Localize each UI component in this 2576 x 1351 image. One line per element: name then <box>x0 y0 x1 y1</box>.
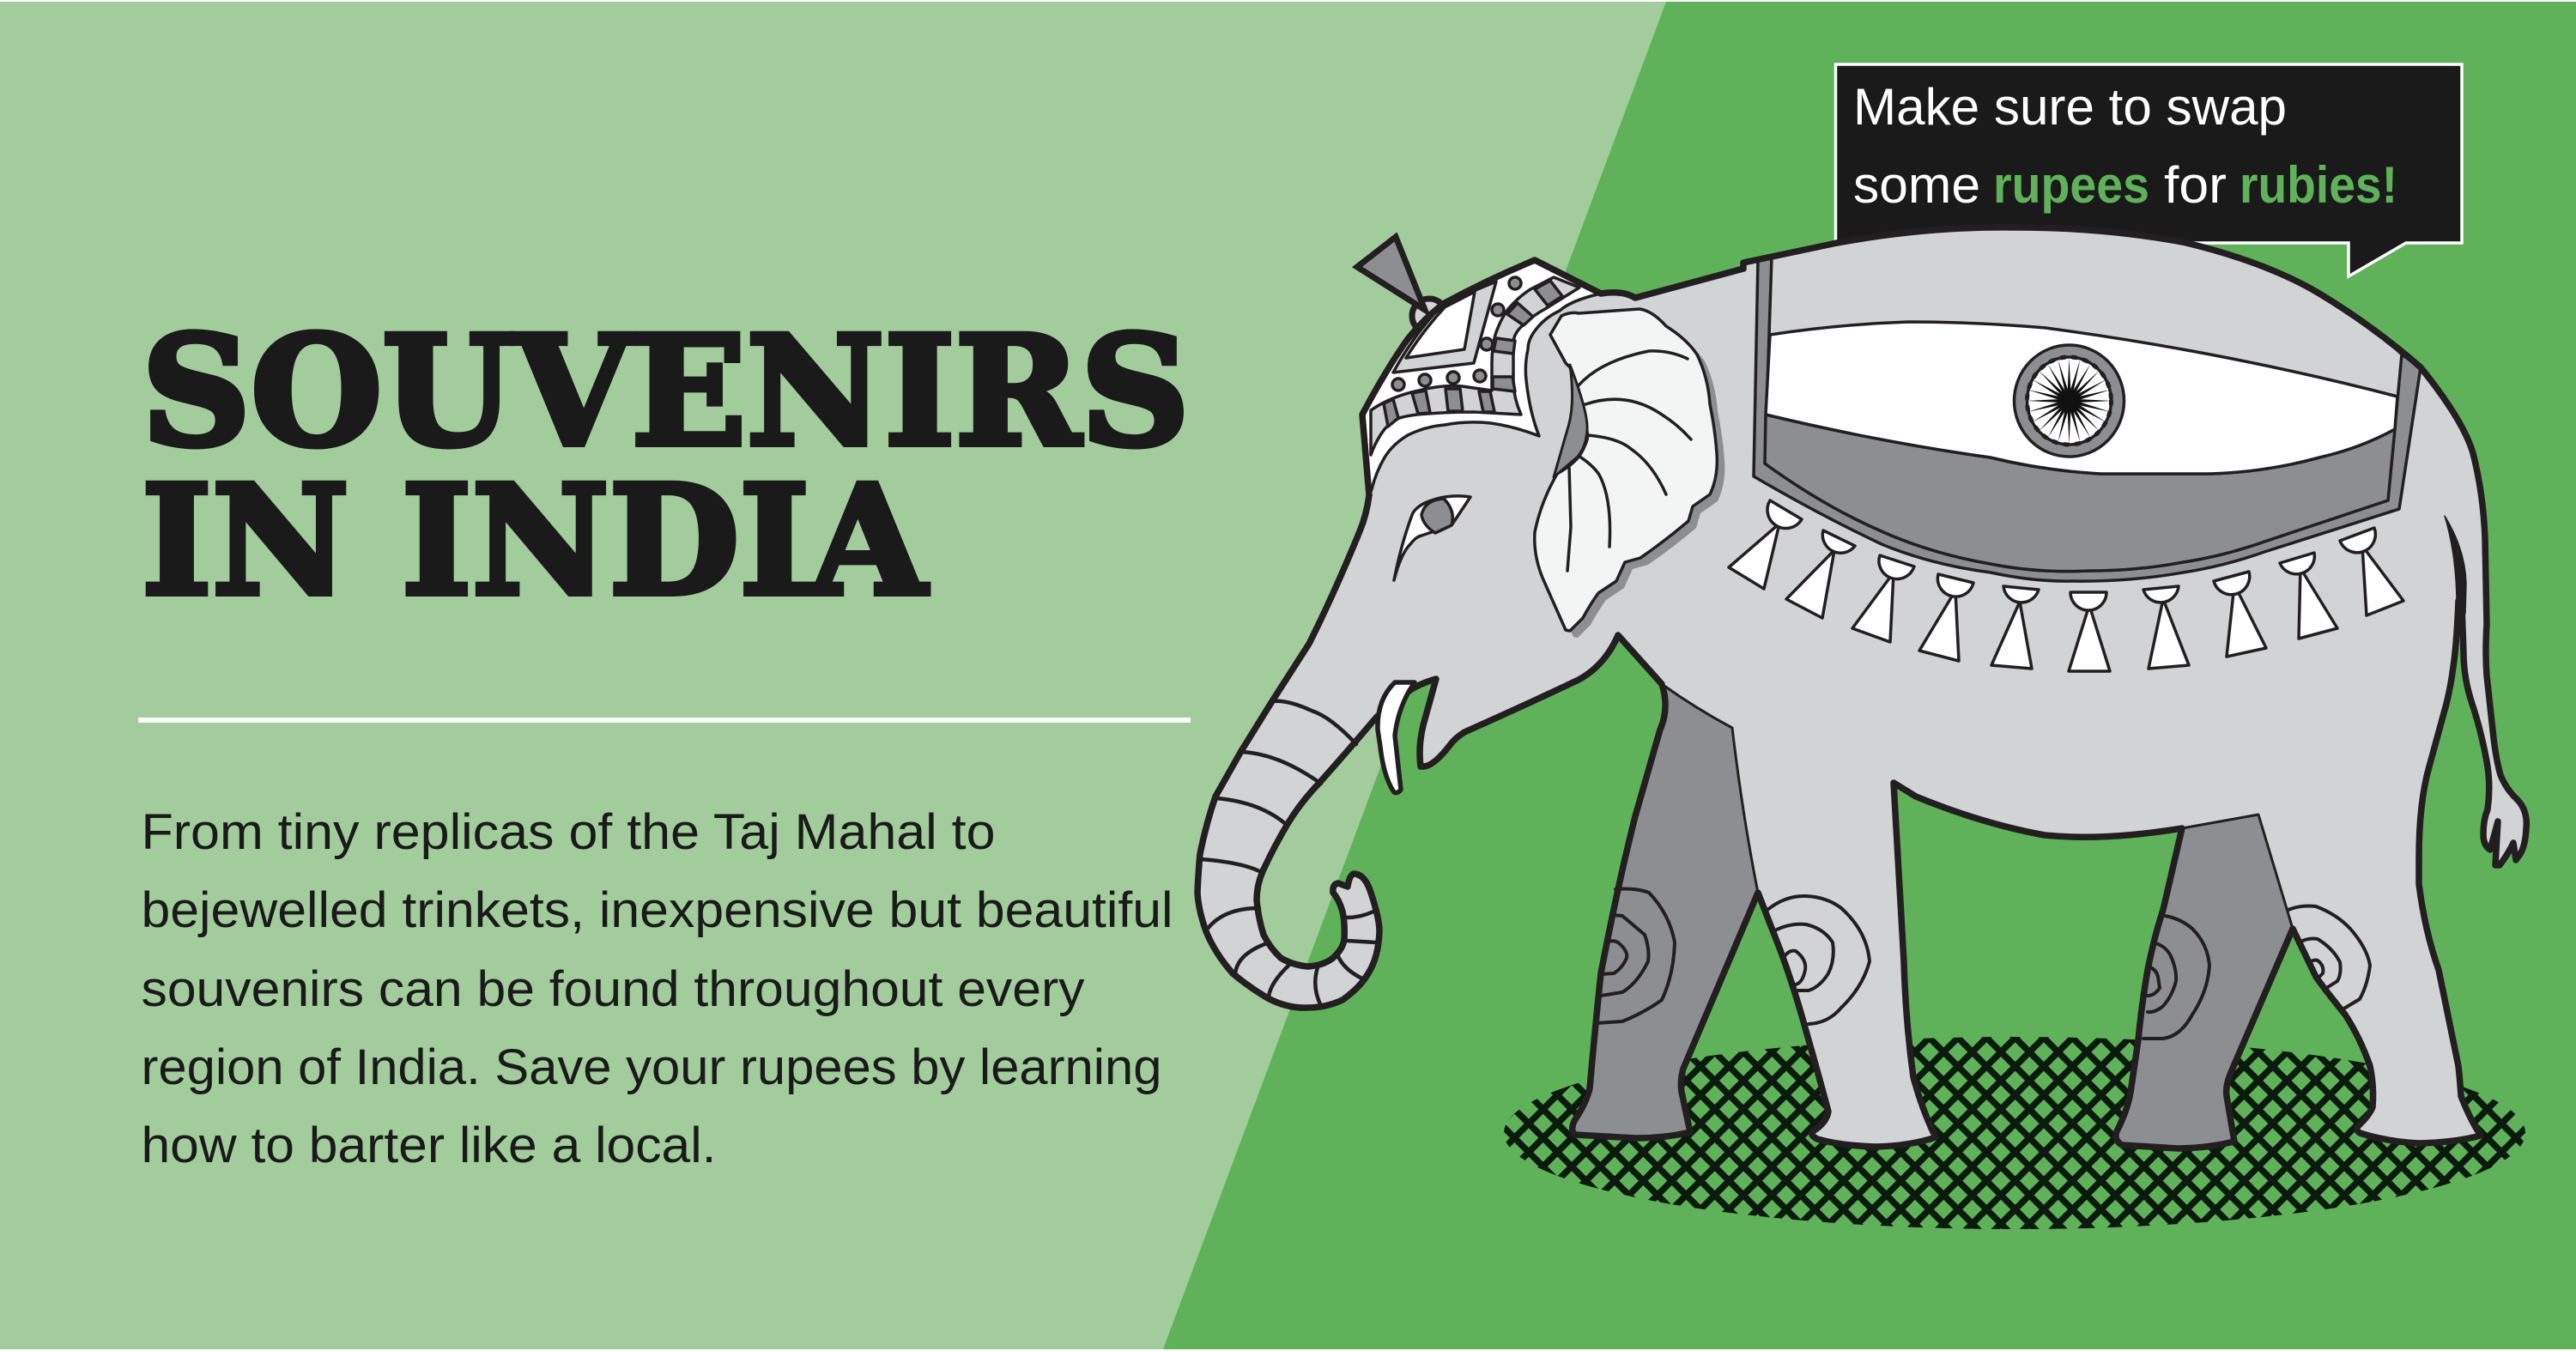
body text: bejewelled trinkets, inexpensive but beautiful <box>141 882 1173 938</box>
title: IN INDIA <box>142 451 928 630</box>
body text: souvenirs can be found throughout every <box>141 961 1085 1017</box>
body text: region of India. Save your rupees by learning <box>141 1039 1162 1095</box>
panel: light green diagonal <box>0 2 1666 1349</box>
callout text: rubies! <box>2240 156 2397 214</box>
callout text: Make sure to swap <box>1853 78 2287 136</box>
tassels <box>1729 500 2403 671</box>
title: SOUVENIRS <box>142 302 1190 481</box>
callout text: rupees <box>1993 156 2149 214</box>
callout speech bubble <box>1835 64 2462 276</box>
ear <box>1535 309 1724 638</box>
elephant body fill <box>1197 227 2526 1147</box>
knee spirals <box>1597 889 2370 1039</box>
body text <box>141 804 1173 1173</box>
blanket <box>1754 227 2421 581</box>
elephant eye <box>1394 496 1470 580</box>
far rear leg <box>2116 815 2293 1148</box>
callout text: some <box>1853 156 1980 214</box>
crown knob and finial <box>1357 237 1446 333</box>
body text: how to barter like a local. <box>141 1118 717 1173</box>
hatched ground shadow <box>1504 1037 2525 1229</box>
tusk <box>1378 682 1415 793</box>
divider rule <box>138 718 1191 723</box>
callout text: for <box>2164 156 2227 214</box>
title <box>142 302 1190 630</box>
ashoka chakra wheel <box>2014 345 2124 457</box>
far front leg <box>1573 684 1758 1138</box>
elephant illustration <box>1197 227 2526 1148</box>
trunk rings <box>1201 701 1376 1006</box>
body text: From tiny replicas of the Taj Mahal to <box>141 804 996 860</box>
headdress <box>1362 260 1601 495</box>
elephant outline <box>1197 227 2526 1147</box>
callout text <box>1853 78 2397 214</box>
